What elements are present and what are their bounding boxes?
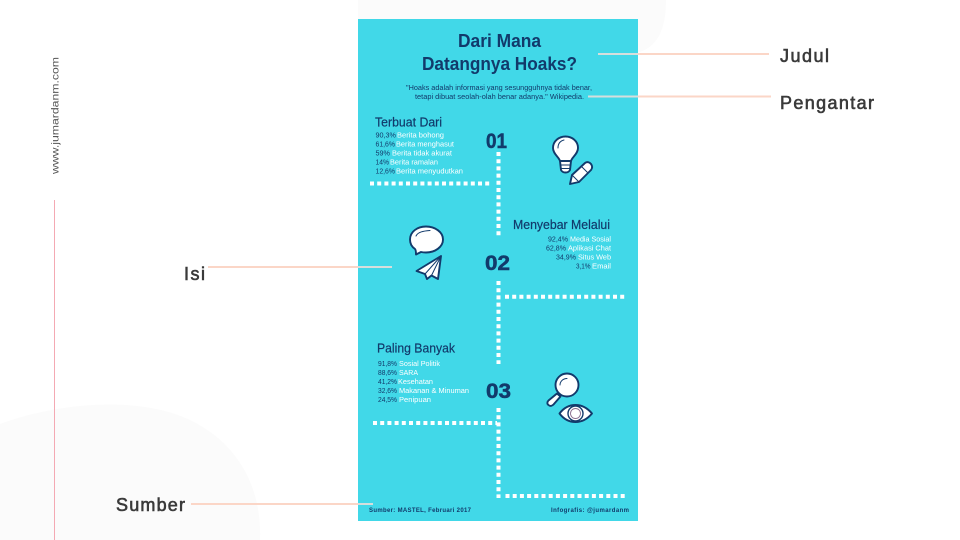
- icon: chat bubble and paper plane: [410, 226, 443, 279]
- section 02: Menyebar Melalui: Menyebar Melalui: [513, 218, 610, 232]
- icon: light bulb and pencil: [553, 136, 592, 184]
- number 03: 03: [486, 379, 511, 403]
- section 03: Paling Banyak: Paling Banyak: [377, 342, 456, 356]
- number 01: 01: [486, 129, 507, 153]
- section 03: Paling Banyak: 88,6%: [378, 368, 397, 377]
- section 01: Terbuat Dari: 59%: [376, 149, 390, 158]
- section 03: Paling Banyak: 41,2%: [378, 377, 397, 386]
- section 01: Terbuat Dari: 61,6%: [376, 140, 395, 149]
- section 02: Menyebar Melalui: [513, 218, 612, 271]
- icon: magnifier and eye: [547, 374, 592, 422]
- website label: www.jumardanm.com: [50, 57, 62, 175]
- section 01: Terbuat Dari: Berita ramalan: [390, 158, 438, 167]
- title: Datangnya Hoaks?: [422, 54, 577, 74]
- section 01: Terbuat Dari: 90,3%: [376, 131, 396, 140]
- callout: Sumber: Sumber: [116, 495, 185, 515]
- section 02: Menyebar Melalui: Media Sosial: [570, 235, 611, 244]
- callout: Isi: Isi: [184, 264, 205, 284]
- section 01: Terbuat Dari: Berita bohong: [397, 131, 444, 140]
- section 02: Menyebar Melalui: 62,8%: [546, 244, 566, 253]
- left accent line: [54, 200, 55, 540]
- intro quote: [406, 83, 592, 101]
- connector 03: [373, 408, 626, 498]
- section 01: Terbuat Dari: Berita tidak akurat: [392, 149, 453, 158]
- section 03: Paling Banyak: [377, 342, 469, 404]
- section 03: Paling Banyak: 91,8%: [378, 359, 397, 368]
- section 03: Paling Banyak: 24,5%: [378, 395, 397, 404]
- section 02: Menyebar Melalui: 34,9%: [556, 253, 576, 262]
- callout: Judul: Judul: [780, 46, 829, 66]
- title: Dari Mana: [458, 31, 542, 51]
- intro quote: "Hoaks adalah informasi yang sesungguhnya tidak benar,: [406, 83, 592, 92]
- section 03: Paling Banyak: Makanan & Minuman: [399, 386, 469, 395]
- section 01: Terbuat Dari: [375, 116, 463, 176]
- section 02: Menyebar Melalui: Aplikasi Chat: [568, 244, 612, 253]
- section 03: Paling Banyak: Sosial Politik: [399, 359, 440, 368]
- section 01: Terbuat Dari: 12,6%: [376, 167, 395, 176]
- title: [422, 31, 577, 74]
- section 03: Paling Banyak: Kesehatan: [398, 377, 433, 386]
- section 02: Menyebar Melalui: 3,1%: [576, 262, 591, 271]
- section 01: Terbuat Dari: Berita menghasut: [396, 140, 455, 149]
- connector 02: [498, 281, 625, 364]
- section 03: Paling Banyak: SARA: [399, 368, 419, 377]
- section 01: Terbuat Dari: Berita menyudutkan: [396, 167, 463, 176]
- section 01: Terbuat Dari: Terbuat Dari: [375, 116, 442, 130]
- source footer: Sumber: MASTEL, Februari 2017: [369, 508, 472, 514]
- section 01: Terbuat Dari: 14%: [376, 158, 389, 167]
- credit footer: Infografis: @jumardanm: [551, 508, 629, 514]
- section 02: Menyebar Melalui: Situs Web: [578, 253, 611, 262]
- number 02: 02: [485, 251, 510, 275]
- section 02: Menyebar Melalui: Email: [592, 262, 611, 271]
- callout: Pengantar: Pengantar: [780, 93, 874, 113]
- connector 01: [370, 152, 498, 236]
- panel: infographic poster: [358, 19, 638, 521]
- section 03: Paling Banyak: Penipuan: [399, 395, 431, 404]
- intro quote: tetapi dibuat seolah-olah benar adanya." Wikipedia.: [415, 92, 584, 101]
- section 03: Paling Banyak: 32,6%: [378, 386, 397, 395]
- section 02: Menyebar Melalui: 92,4%: [548, 235, 568, 244]
